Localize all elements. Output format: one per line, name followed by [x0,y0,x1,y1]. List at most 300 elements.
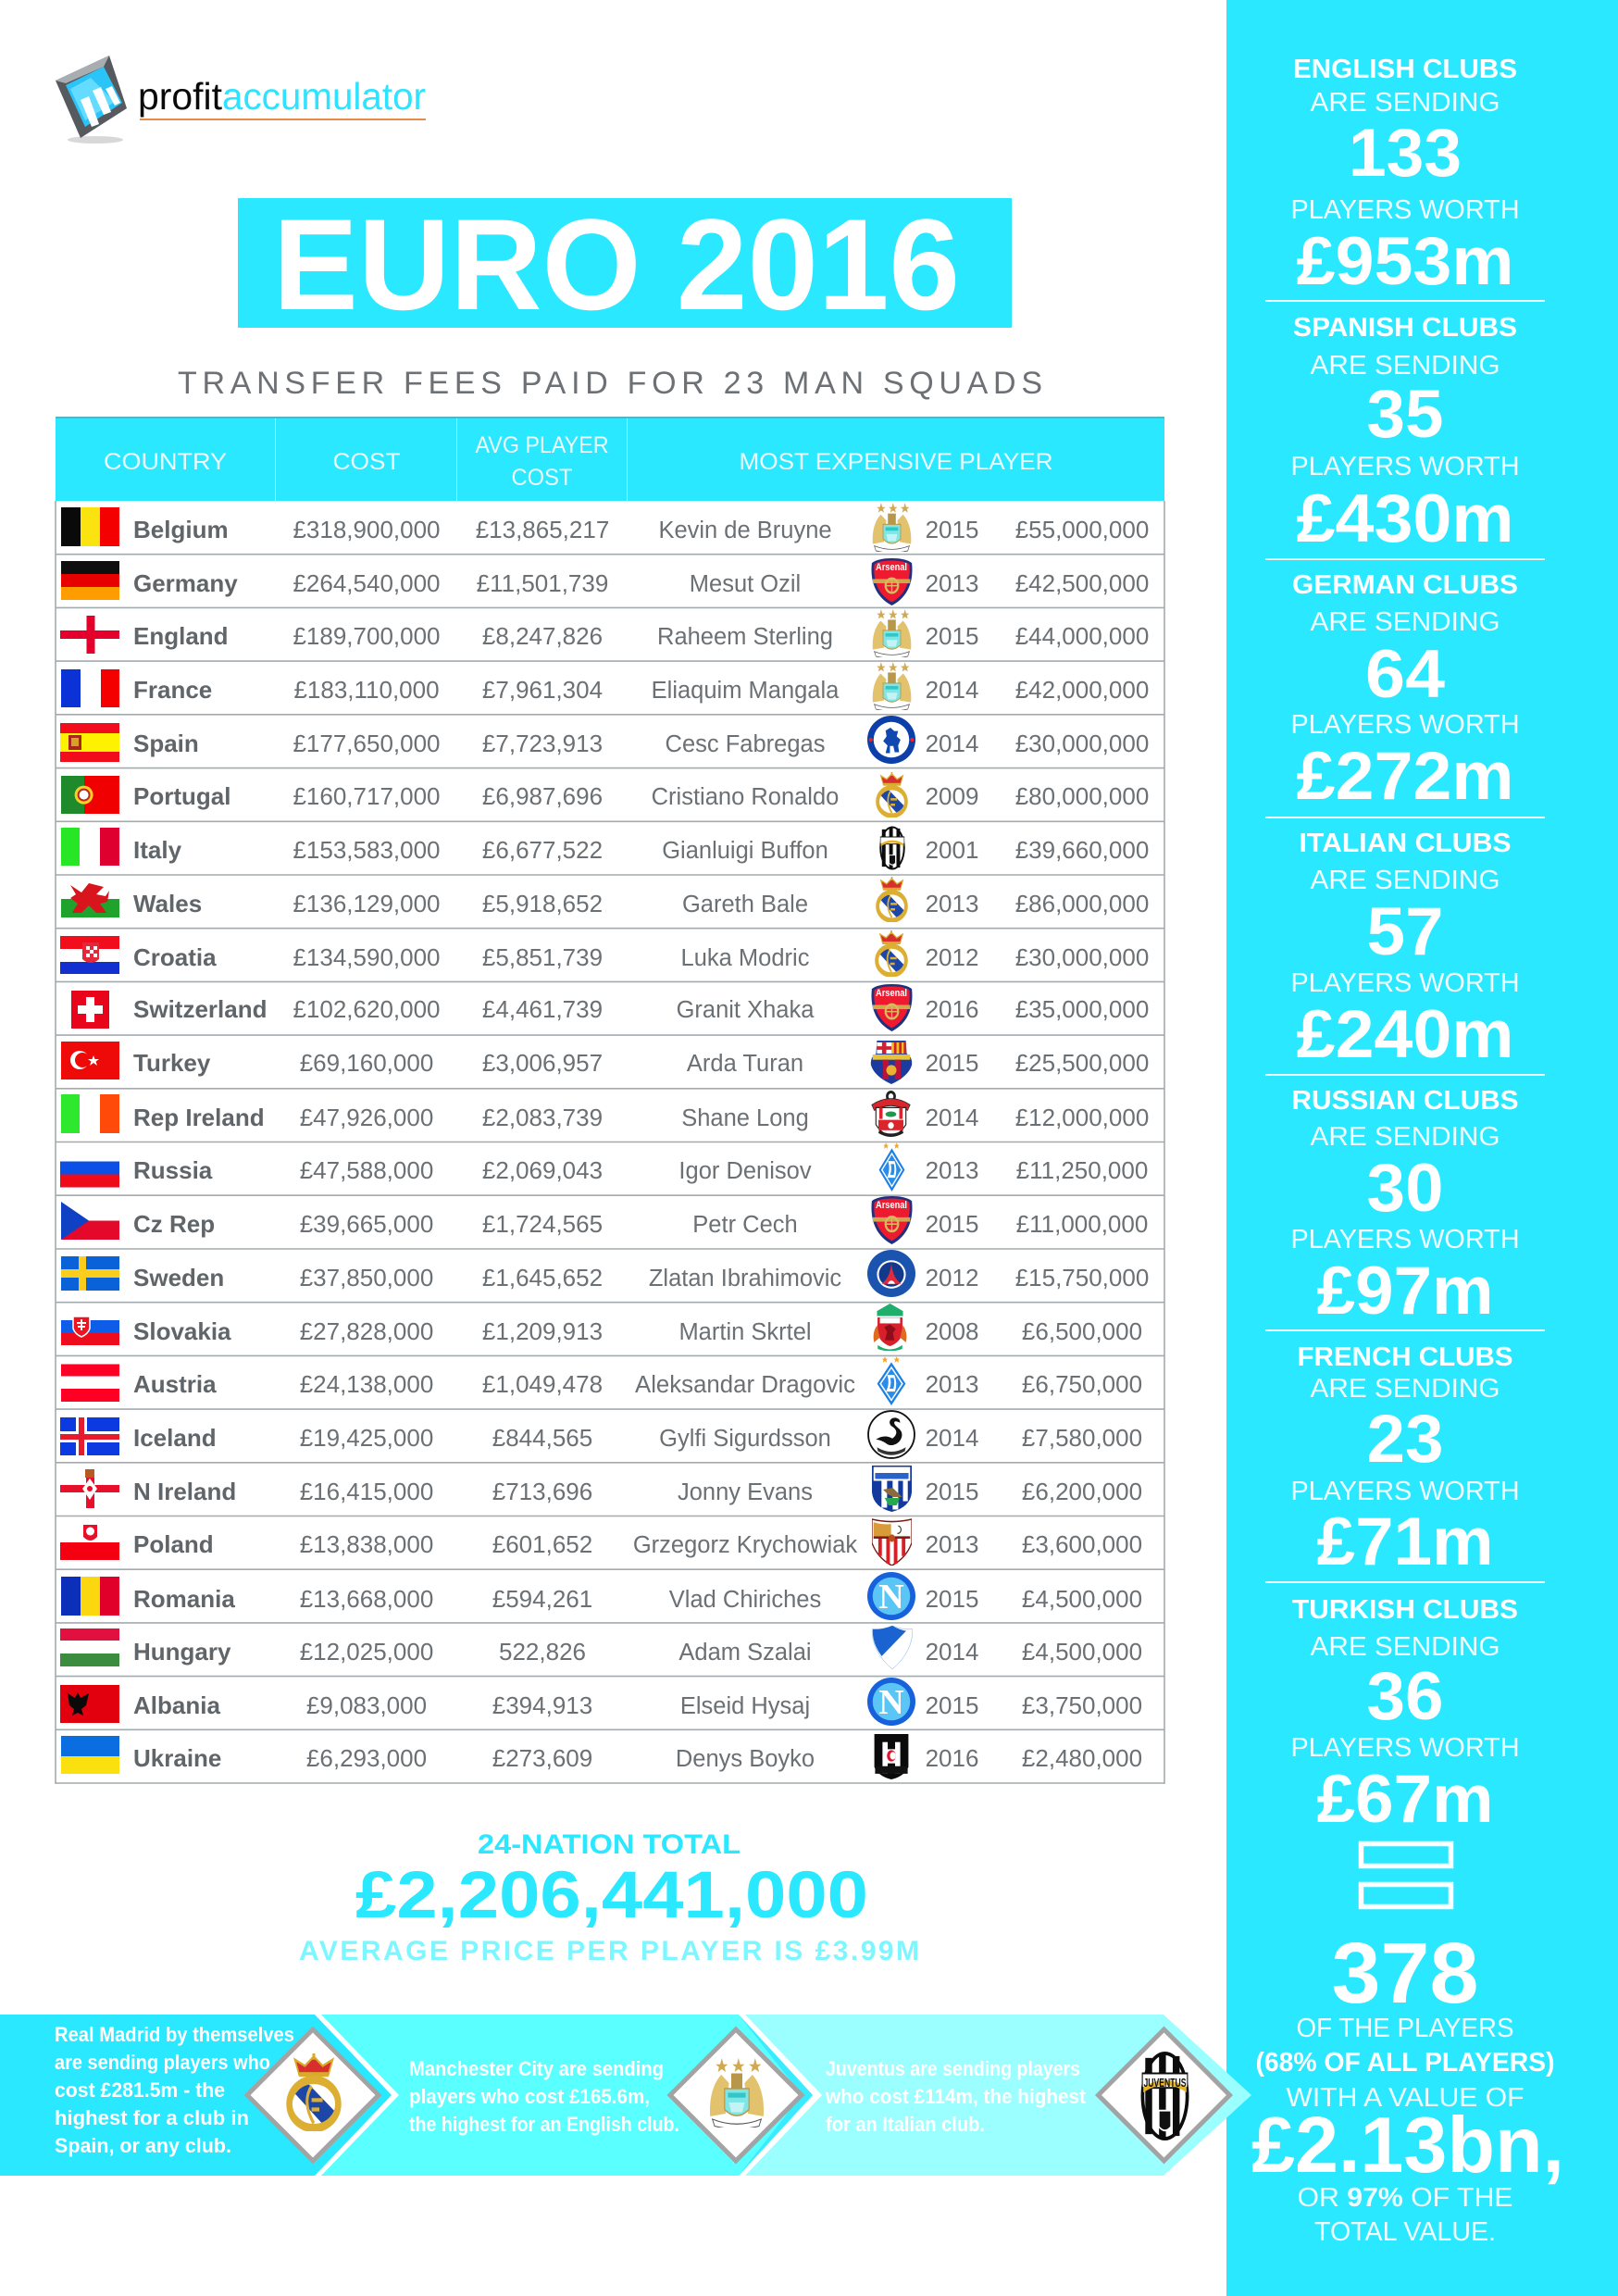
crest: Arsenal: Arsenal [876,1200,907,1211]
crest: Liverpool [874,1304,906,1352]
row text: Russia: Russia [133,1156,213,1184]
row text: Russia: £2,069,043 [482,1156,603,1184]
flag: England [60,616,119,654]
flag: Rep Ireland [61,1094,119,1133]
table header: AVG PLAYER [476,432,609,458]
row text: Albania: Elseid Hysaj [680,1693,810,1719]
crest: Manchester City [873,503,911,553]
logo wordmark: profit [138,75,223,118]
badge: Juventus [1098,2029,1229,2161]
row: Slovakia [61,1304,1142,1352]
row text: Ukraine: Ukraine [133,1744,221,1772]
row text: Iceland: 2014 [926,1424,978,1452]
row text: Albania: 2015 [926,1691,978,1719]
row text: N Ireland: £6,200,000 [1022,1478,1142,1505]
stat: Russian clubs: PLAYERS WORTH [1290,1225,1520,1254]
row text: Belgium: 2015 [926,516,978,543]
row text: Rep Ireland [133,1104,1149,1131]
row text: Switzerland [133,995,1149,1023]
row text: Hungary: Adam Szalai [678,1640,812,1666]
row text: Rep Ireland: £47,926,000 [300,1104,433,1131]
row text: Cz Rep: £11,000,000 [1016,1210,1148,1238]
crest: Dynamo [879,1142,904,1192]
stat: German clubs: £272m [1296,739,1514,814]
crest: Chelsea [867,716,915,764]
row text: Croatia: Luka Modric [681,945,810,971]
row text: France: Eliaquim Mangala [652,678,840,704]
row: Albania [60,1678,1142,1726]
stat: English clubs [1265,55,1545,302]
row text: France: £183,110,000 [293,676,440,704]
row: Sweden [61,1250,1149,1297]
stat: Spanish clubs [1265,313,1545,560]
row text: Rep Ireland: Shane Long [681,1105,809,1131]
row text: Germany [133,569,1149,597]
stat: Russian clubs: 30 [1366,1151,1444,1226]
flag: Croatia [60,936,119,974]
stat: English clubs: PLAYERS WORTH [1290,195,1520,225]
title: EURO 2016: EURO 2016 [273,192,960,337]
table header: COST [511,465,572,491]
stat: Turkish clubs: TURKISH CLUBS [1292,1595,1518,1625]
row text: Turkey: 2015 [926,1049,978,1077]
summary: total value: TOTAL VALUE. [1314,2217,1496,2247]
stat: Russian clubs [1265,1086,1545,1331]
row text: Albania: £9,083,000 [306,1691,427,1719]
stat: English clubs: £953m [1296,224,1514,299]
row text: Croatia: 2012 [926,943,978,971]
row text: Ukraine: £6,293,000 [306,1744,427,1772]
Manchester City fact text: players who cost £165.6m, [409,2085,650,2108]
crest: Real Madrid [877,772,906,817]
row text: Hungary [133,1638,1142,1666]
stat: Spanish clubs: 35 [1366,377,1444,452]
row text: N Ireland: 2015 [926,1478,978,1505]
segment: Juventus [745,2015,1251,2176]
segment: Manchester City [321,2015,813,2176]
crest: Napoli [867,1678,915,1726]
stat: Russian clubs: £97m [1316,1254,1494,1329]
row: Turkey [61,1041,1149,1084]
Real Madrid fact text: Spain, or any club. [55,2134,231,2157]
row text: Slovakia: Martin Skrtel [678,1319,812,1345]
summary: with a value of: WITH A VALUE OF [1287,2083,1524,2113]
row text: Wales: Wales [133,890,202,917]
row: Croatia [60,930,1149,976]
row text: Russia: £47,588,000 [300,1156,433,1184]
row text: Ukraine: Denys Boyko [676,1746,815,1772]
crest: Besiktas [875,1734,908,1779]
flag: Germany [61,561,119,600]
row text: Turkey [133,1049,1149,1077]
row text: Rep Ireland: Rep Ireland [133,1104,265,1131]
row text: Romania: £594,261 [492,1585,592,1613]
row text: Ukraine: 2016 [926,1744,978,1772]
table header: COST [333,449,400,475]
row text: Russia: £11,250,000 [1016,1156,1148,1184]
flag: Poland [60,1525,119,1560]
crest: Manchester City [873,662,911,711]
badge: Juventus: JUVENTUS [1144,2076,1187,2090]
stat: Turkish clubs: ARE SENDING [1311,1632,1500,1662]
flag: Turkey [61,1042,119,1079]
row text: France: France [133,676,212,704]
row text: Slovakia [133,1317,1142,1345]
total amount: £2,206,441,000 [355,1859,868,1932]
crest: Arsenal: Arsenal [876,562,907,573]
row text: Cz Rep: Petr Cech [692,1212,798,1238]
row text: Iceland: £7,580,000 [1022,1424,1142,1452]
row text: Rep Ireland: £2,083,739 [482,1104,603,1131]
stat: Turkish clubs: PLAYERS WORTH [1290,1733,1520,1763]
flag: Iceland [60,1417,119,1455]
row text: Belgium: £318,900,000 [292,516,441,543]
stat: French clubs: PLAYERS WORTH [1290,1477,1520,1506]
flag: Albania [60,1685,119,1723]
row: Switzerland [71,984,1149,1031]
Manchester City fact text: the highest for an English club. [409,2113,679,2136]
row text: Austria: £6,750,000 [1022,1370,1142,1398]
row text: Cz Rep [133,1210,1148,1238]
stat: Russian clubs: RUSSIAN CLUBS [1292,1086,1518,1116]
flag: Cz Rep [61,1202,119,1240]
row text: Italy: £153,583,000 [292,836,441,864]
crest: Barcelona [871,1041,912,1084]
badge: Manchester City [670,2029,802,2161]
stat: English clubs: ARE SENDING [1311,88,1500,118]
row text: N Ireland: £16,415,000 [300,1478,433,1505]
row text: N Ireland: N Ireland [133,1478,236,1505]
row text: Spain [133,730,1149,757]
row text: N Ireland: £713,696 [492,1478,592,1505]
row: Spain [60,716,1149,764]
row text: Italy: Gianluigi Buffon [662,838,828,864]
summary: percent of value: OR 97% OF THE [1298,2183,1512,2213]
icon: logo tablet [56,56,127,144]
stat: Italian clubs: 57 [1366,894,1444,969]
row text: Turkey: £25,500,000 [1015,1049,1149,1077]
row text: Ukraine [133,1744,1142,1772]
row text: Iceland: Iceland [133,1424,217,1452]
row text: Sweden: £1,645,652 [482,1264,603,1292]
stat: Italian clubs: ITALIAN CLUBS [1300,829,1511,858]
row text: England: £189,700,000 [292,622,441,650]
row text: Sweden: 2012 [926,1264,978,1292]
logo: profitaccumulator [56,56,426,144]
row text: Wales: £5,918,652 [482,890,603,917]
stat: German clubs: PLAYERS WORTH [1290,710,1520,740]
row text: Belgium: Belgium [133,516,229,543]
row: England [60,609,1149,658]
stat: Italian clubs [1265,829,1545,1076]
Real Madrid fact text: highest for a club in [55,2106,249,2129]
summary: value: £2.13bn, [1251,2102,1564,2190]
row text: Germany: Germany [133,569,238,597]
row text: Switzerland: £4,461,739 [482,995,603,1023]
row text: England [133,622,1149,650]
row text: Sweden: £37,850,000 [300,1264,433,1292]
row text: Portugal: 2009 [926,782,978,810]
summary: player count: 378 [1331,1925,1479,2021]
row text: Slovakia: 2008 [926,1317,978,1345]
row text: Hungary: Hungary [133,1638,231,1666]
row: N Ireland [60,1466,1142,1512]
row text: Cz Rep: £39,665,000 [300,1210,433,1238]
row text: Germany: £11,501,739 [477,569,608,597]
summary: percent of players: (68% OF ALL PLAYERS) [1255,2048,1555,2078]
row text: Sweden: Sweden [133,1264,224,1292]
row text: Austria: 2013 [926,1370,978,1398]
table: transfer fees [56,417,1164,1784]
crest: Hoffenheim [872,1626,913,1669]
row text: Albania: Albania [133,1691,220,1719]
row: Wales [61,877,1149,921]
row text: Poland: Grzegorz Krychowiak [633,1532,857,1558]
row: Portugal [61,772,1149,817]
stat: French clubs: FRENCH CLUBS [1298,1342,1512,1372]
row text: Italy [133,836,1149,864]
row text: Hungary: 2014 [926,1638,978,1666]
row text: Romania: Romania [133,1585,235,1613]
row: Belgium [61,503,1149,553]
row text: Switzerland: Granit Xhaka [677,997,815,1023]
row text: Turkey: Turkey [133,1049,211,1077]
stat: Italian clubs: £240m [1296,997,1514,1072]
crest: Real Madrid [877,877,906,921]
row text: Albania: £3,750,000 [1022,1691,1142,1719]
row: Rep Ireland [61,1091,1149,1137]
row text: Switzerland: Switzerland [133,995,267,1023]
row text: Slovakia: £27,828,000 [300,1317,433,1345]
crest: Manchester City [873,609,911,658]
row: Iceland [60,1411,1142,1458]
Manchester City fact text [409,2057,679,2136]
row text: France: £42,000,000 [1015,676,1149,704]
row text: Hungary: 522,826 [499,1638,586,1666]
crest: Arsenal [871,558,913,605]
row text: N Ireland [133,1478,1142,1505]
crest: Napoli [867,1572,915,1620]
row: Germany [61,558,1149,605]
row text: Ukraine: £2,480,000 [1022,1744,1142,1772]
stat: French clubs: 23 [1366,1402,1444,1477]
stat: Turkish clubs: £67m [1316,1762,1494,1837]
row text: Wales: 2013 [926,890,978,917]
row text: Slovakia: £1,209,913 [482,1317,603,1345]
row text: Spain: £30,000,000 [1015,730,1149,757]
stat: French clubs: £71m [1316,1504,1494,1579]
stat: Italian clubs: ARE SENDING [1311,866,1500,895]
row text: Turkey: £3,006,957 [482,1049,603,1077]
row: Russia [60,1142,1148,1192]
row text: Sweden: £15,750,000 [1015,1264,1149,1292]
row text: Sweden: Zlatan Ibrahimovic [649,1266,841,1292]
row text: Cz Rep: 2015 [926,1210,978,1238]
stat: Turkish clubs: 36 [1366,1659,1444,1734]
flag: Portugal [61,776,119,814]
flag: Austria [61,1365,119,1402]
stat: Spanish clubs: SPANISH CLUBS [1293,313,1517,343]
row text: Sweden [133,1264,1149,1292]
row text: Croatia: £134,590,000 [292,943,441,971]
summary: of the players: OF THE PLAYERS [1296,2014,1514,2043]
stat: Spanish clubs: £430m [1296,481,1514,556]
row text: Belgium [133,516,1149,543]
row text: Poland: Poland [133,1530,214,1558]
row text: N Ireland: Jonny Evans [678,1479,813,1505]
row text: Ukraine: £273,609 [492,1744,592,1772]
row: Italy [61,826,1149,870]
row text: Portugal: £6,987,696 [482,782,603,810]
row text: Iceland [133,1424,1142,1452]
row text: Hungary: £12,025,000 [300,1638,433,1666]
row text: Germany: 2013 [926,569,978,597]
row: Hungary [60,1626,1142,1669]
row text: Wales [133,890,1149,917]
segment: Real Madrid [0,2015,392,2176]
crest: Southampton [872,1091,910,1137]
Real Madrid fact text [55,2023,294,2157]
Juventus fact text: for an Italian club. [826,2113,985,2136]
row text: Italy: Italy [133,836,182,864]
row text: Belgium: £13,865,217 [476,516,609,543]
row text: France [133,676,1149,704]
Juventus fact text: Juventus are sending players [826,2057,1080,2080]
Real Madrid fact text: are sending players who [55,2051,270,2074]
summary stat [1251,1925,1564,2247]
row text: Portugal [133,782,1149,810]
crest: Sevilla [872,1519,912,1566]
row text: Switzerland: £35,000,000 [1015,995,1149,1023]
row: France [61,662,1149,711]
row text: Russia: 2013 [926,1156,978,1184]
stat: French clubs [1265,1342,1545,1583]
row text: Germany: £42,500,000 [1015,569,1149,597]
row text: Spain: 2014 [926,730,978,757]
row text: Austria: £24,138,000 [300,1370,433,1398]
row text: Italy: £39,660,000 [1015,836,1149,864]
row text: Croatia: £5,851,739 [482,943,603,971]
row text: Cz Rep: Cz Rep [133,1210,215,1238]
stat: German clubs: ARE SENDING [1311,607,1500,637]
badge: Real Madrid [247,2029,379,2161]
row text: Portugal: £160,717,000 [292,782,441,810]
stat: English clubs: 133 [1349,116,1462,191]
flag: Slovakia [61,1316,119,1345]
flag: Russia [60,1161,119,1187]
Juventus fact text [825,2057,1086,2136]
row text: Romania: Vlad Chiriches [669,1587,821,1613]
row text: Slovakia: £6,500,000 [1022,1317,1142,1345]
row text: Poland [133,1530,1142,1558]
crest: Napoli: N [878,1683,904,1722]
flag: N Ireland [60,1469,119,1508]
row text: Rep Ireland: £12,000,000 [1015,1104,1149,1131]
row text: Portugal: Cristiano Ronaldo [652,784,839,810]
row text: Albania: £394,913 [492,1691,592,1719]
row text: Russia [133,1156,1148,1184]
Manchester City fact text: Manchester City are sending [409,2057,664,2080]
average price: AVERAGE PRICE PER PLAYER IS £3.99M [299,1936,919,1966]
row text: Iceland: Gylfi Sigurdsson [659,1426,831,1452]
crest: Real Madrid [877,930,906,976]
row text: Iceland: £19,425,000 [300,1424,433,1452]
crest: Napoli: N [878,1578,904,1616]
row text: Hungary: £4,500,000 [1022,1638,1142,1666]
stat: Italian clubs: PLAYERS WORTH [1290,968,1520,998]
crest: Juventus [879,826,905,870]
crest: Arsenal [871,984,913,1031]
row text: Turkey: Arda Turan [687,1051,803,1077]
row text: France: £7,961,304 [482,676,603,704]
row text: Romania [133,1585,1142,1613]
crest: Swansea City [868,1411,915,1458]
Juventus fact text: who cost £114m, the highest [825,2085,1086,2108]
table header: MOST EXPENSIVE PLAYER [739,449,1053,475]
flag: Wales [61,883,119,917]
crest: Paris Saint-Germain [867,1250,915,1297]
row: Austria [61,1356,1142,1405]
row: Cz Rep [61,1196,1148,1244]
panel: right sidebar [1226,0,1618,2296]
stat: Russian clubs: ARE SENDING [1311,1122,1500,1152]
row text: Wales: £136,129,000 [292,890,441,917]
flag: Switzerland [71,991,109,1029]
row text: Wales: Gareth Bale [682,892,808,917]
stat: English clubs: ENGLISH CLUBS [1293,55,1517,84]
Real Madrid fact text: cost £281.5m - the [55,2078,225,2102]
flag: Hungary [60,1628,119,1666]
stat: French clubs: ARE SENDING [1311,1374,1500,1404]
Real Madrid fact text: Real Madrid by themselves [55,2023,294,2046]
24-nation total [299,1829,919,1966]
total label: 24-NATION TOTAL [478,1829,741,1860]
row text: Albania [133,1691,1142,1719]
row text: Poland: £601,652 [492,1530,592,1558]
row text: Croatia: £30,000,000 [1015,943,1149,971]
stat: German clubs: GERMAN CLUBS [1292,570,1518,600]
row text: Croatia [133,943,1149,971]
row text: Spain: £177,650,000 [292,730,441,757]
flag: Belgium [61,507,119,546]
row text: Croatia: Croatia [133,943,217,971]
row text: Belgium: Kevin de Bruyne [658,518,832,543]
row text: Austria: Aleksandar Dragovic [635,1372,855,1398]
row text: Spain: Cesc Fabregas [666,731,825,757]
row text: Germany: Mesut Ozil [690,571,801,597]
row text: France: 2014 [926,676,978,704]
crest: Arsenal [871,1196,913,1244]
flag: Romania [61,1577,119,1616]
row text: Spain: Spain [133,730,199,757]
band: club facts [0,2015,1251,2176]
table header [56,417,1164,501]
row text: England: England [133,622,229,650]
stat: German clubs [1265,570,1545,818]
flag: Sweden [61,1256,119,1291]
crest: Dynamo [877,1356,905,1405]
flag: Ukraine [61,1736,119,1774]
row text: Austria: £1,049,478 [482,1370,603,1398]
row text: Poland: £13,838,000 [300,1530,433,1558]
row text: Romania: £4,500,000 [1022,1585,1142,1613]
row text: England: 2015 [926,622,978,650]
row text: Italy: £6,677,522 [482,836,603,864]
row text: Turkey: £69,160,000 [300,1049,433,1077]
icon: equals sign [1361,1844,1451,1907]
row text: Austria [133,1370,1142,1398]
row text: Portugal: Portugal [133,782,230,810]
